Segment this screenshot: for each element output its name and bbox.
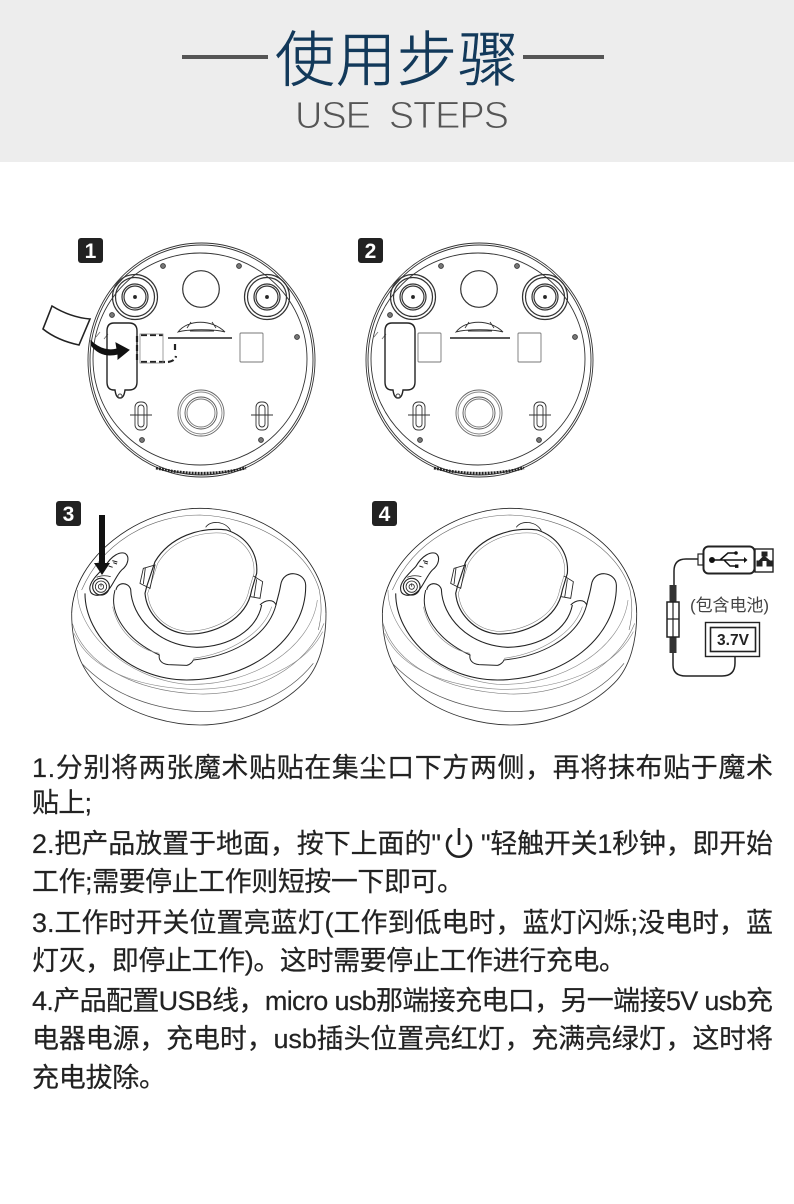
step 4 robot top view: [382, 508, 637, 725]
cable: [673, 559, 735, 676]
step 3 number badge: [56, 501, 81, 526]
title: 使用步骤: [275, 27, 518, 94]
cable sleeve: [667, 585, 679, 653]
step 4 text: 4.产品配置USB线，micro usb那端接充电口，另一端接5V usb充: [32, 986, 773, 1016]
step 1 number badge: [78, 238, 103, 263]
fitted velcro square: [418, 333, 441, 362]
step 3 diagram: [56, 501, 326, 725]
icon: power: [447, 828, 471, 857]
step 1 diagram: [43, 238, 315, 477]
battery label: 3.7V: [717, 632, 750, 649]
step 3 text: 3.工作时开关位置亮蓝灯(工作到低电时，蓝灯闪烁;没电时，蓝: [32, 908, 773, 938]
step 3 text: 灯灭，即停止工作)。这时需要停止工作进行充电。: [32, 946, 626, 976]
step 2 number badge: [358, 238, 383, 263]
step 2 robot underside: [366, 243, 593, 477]
step 4 text: [32, 986, 773, 1093]
usb charging cable: [667, 546, 773, 676]
cloth sticker: [43, 306, 90, 345]
subtitle: USE STEPS: [295, 95, 509, 137]
step 1 text: 贴上;: [32, 788, 92, 818]
step 4 number badge: 4: [379, 503, 391, 526]
step 4 number badge: [372, 501, 397, 526]
step 3 number badge: 3: [63, 503, 74, 526]
instructions text: [32, 753, 773, 1093]
step 2 text: 工作;需要停止工作则短按一下即可。: [32, 867, 464, 897]
title: [182, 27, 604, 94]
press arrow: [94, 515, 110, 575]
header band: [0, 0, 794, 162]
step 3 robot top view: [72, 508, 326, 725]
usb plug: [698, 546, 773, 574]
step 3 text: [32, 908, 773, 976]
step 1 number badge: 1: [85, 240, 97, 263]
step 1 robot underside: [88, 243, 315, 477]
curved arrow: [91, 341, 129, 359]
step 4 diagram: [372, 501, 637, 725]
dashed velcro position: [137, 334, 176, 363]
step 2 number badge: 2: [365, 240, 376, 263]
step 1 text: [32, 753, 773, 818]
step 2 text: "轻触开关1秒钟，即开始: [481, 829, 773, 859]
battery note: (包含电池): [690, 596, 769, 615]
step 2 text: 2.把产品放置于地面，按下上面的": [32, 829, 441, 859]
step 2 text: [32, 828, 773, 897]
step 1 text: 1.分别将两张魔术贴贴在集尘口下方两侧，再将抹布贴于魔术: [32, 753, 773, 783]
step 4 text: 充电拔除。: [32, 1063, 166, 1093]
step 2 diagram: [358, 238, 593, 477]
step 4 text: 电器电源，充电时，usb插头位置亮红灯，充满亮绿灯，这时将: [32, 1024, 773, 1054]
